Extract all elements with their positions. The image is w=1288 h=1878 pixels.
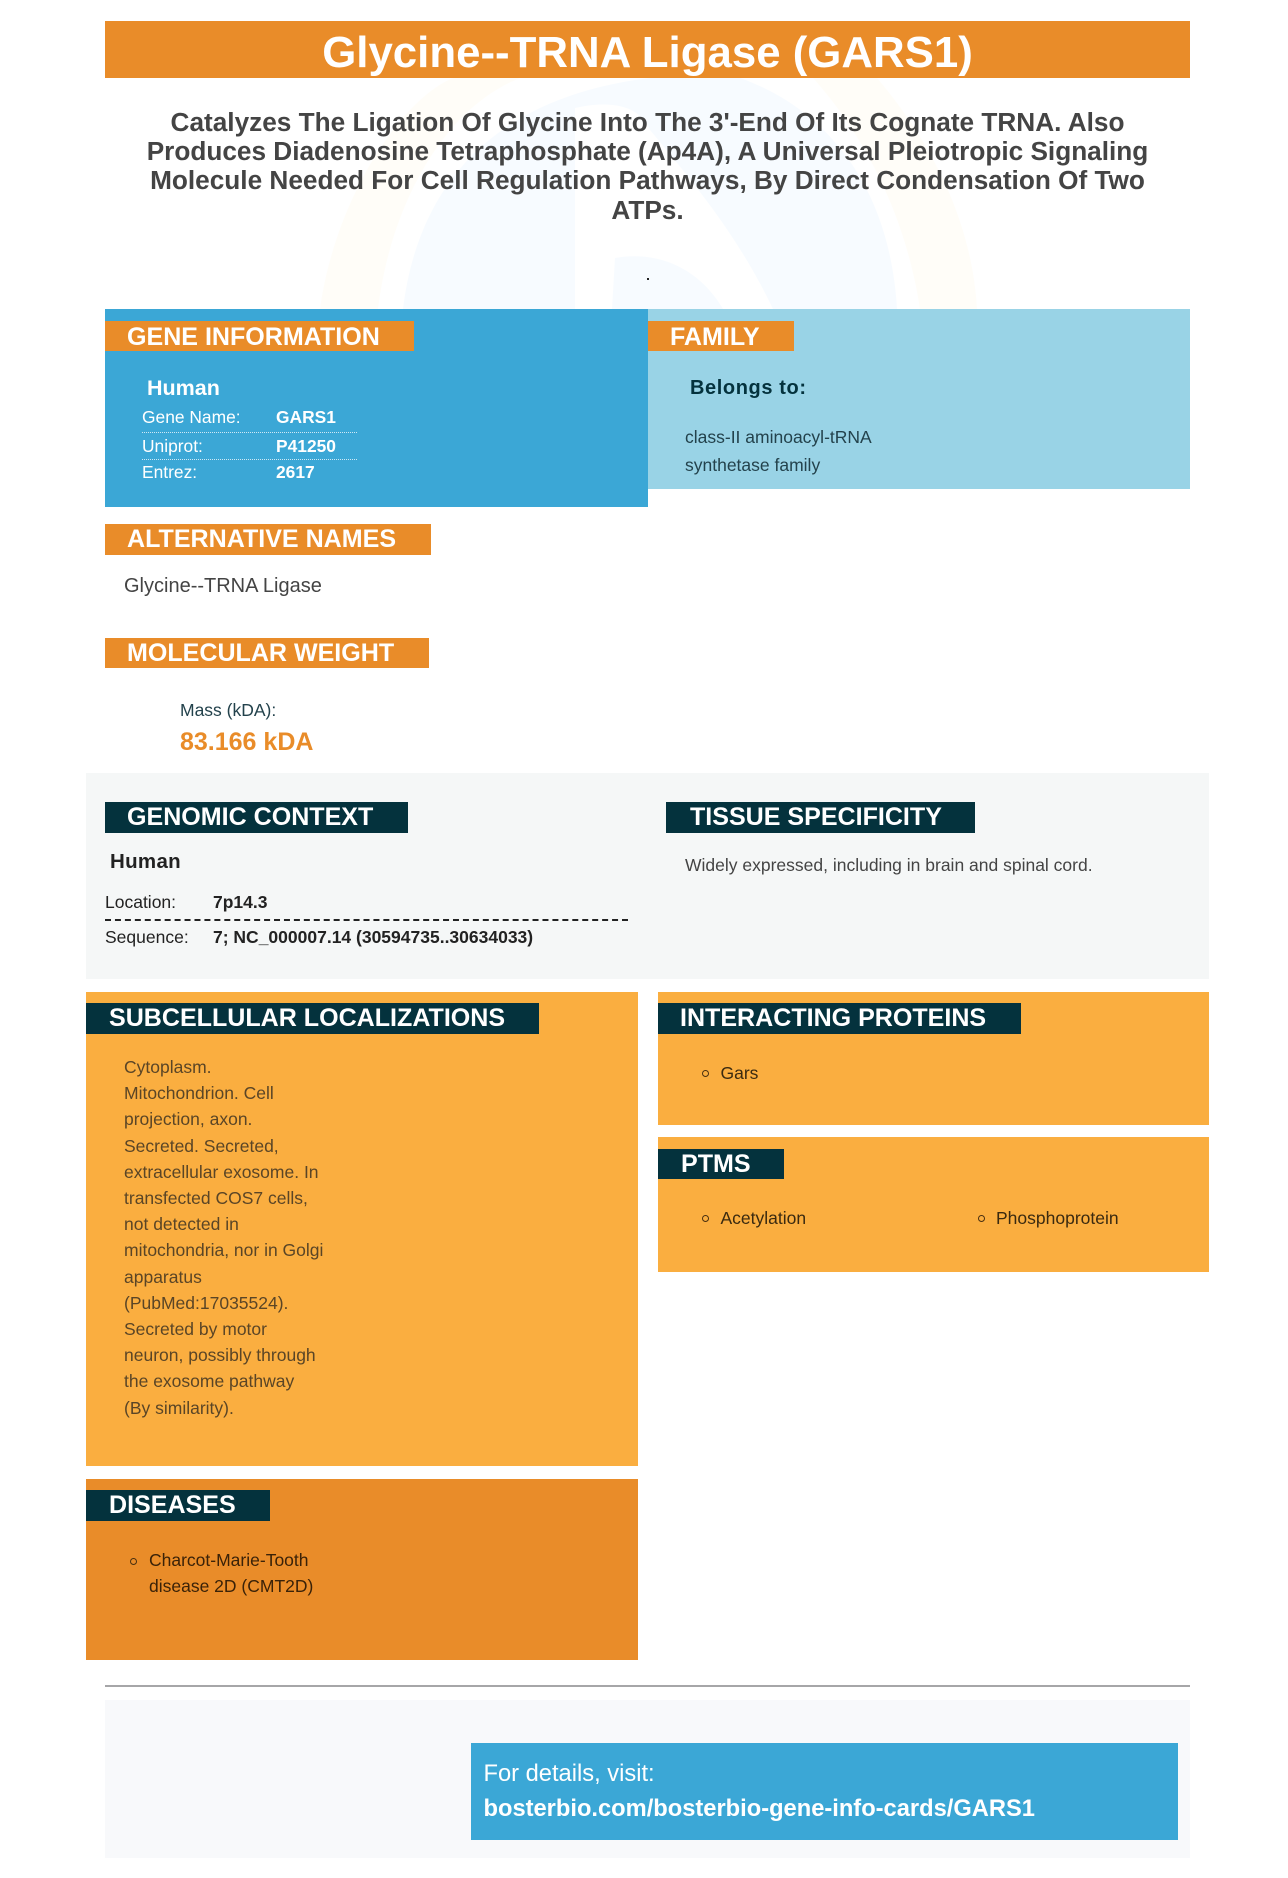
location table	[105, 892, 628, 947]
heading: gene information: GENE INFORMATION	[127, 323, 380, 351]
heading: family: FAMILY	[670, 323, 760, 351]
location table: 7; NC_000007.14 (30594735..30634033)	[213, 927, 533, 947]
gene table: Uniprot:	[142, 436, 203, 456]
panel: subcellular localizations	[86, 992, 638, 1466]
callout: details link	[471, 1743, 1178, 1840]
text: localization description: (PubMed:17035524).	[124, 1293, 288, 1313]
text: localization description: not detected in	[124, 1214, 239, 1234]
list item: Gars	[702, 1063, 758, 1083]
mass block: 83.166 kDA	[180, 728, 313, 756]
background watermark	[0, 0, 1288, 320]
heading: genomic context: GENOMIC CONTEXT	[127, 803, 373, 831]
location table: Location:	[105, 892, 176, 912]
text: localization description: Cytoplasm.	[124, 1057, 212, 1077]
text: localization description: Mitochondrion. Cell	[124, 1083, 274, 1103]
callout: details link: bosterbio.com/bosterbio-gene-info-cards/GARS1	[484, 1796, 1035, 1822]
list item: disease: Charcot-Marie-Tooth	[149, 1550, 308, 1570]
list item: Phosphoprotein: Phosphoprotein	[996, 1208, 1119, 1228]
callout: details link: For details, visit:	[484, 1761, 655, 1787]
list item: Gars: Gars	[720, 1063, 758, 1083]
gene table: P41250	[276, 436, 336, 456]
panel: gene information	[105, 309, 648, 507]
text: tissue specificity: Widely expressed, including in brain and spinal cord.	[685, 855, 1093, 875]
species label: Human	[110, 850, 181, 873]
text: localization description: (By similarity).	[124, 1398, 234, 1418]
text: localization description: apparatus	[124, 1267, 202, 1287]
gene table: Gene Name:	[142, 407, 241, 427]
text: localization description: projection, axon.	[124, 1109, 252, 1129]
panel: interacting proteins	[658, 992, 1209, 1125]
heading: subcellular localizations: SUBCELLULAR LOCALIZATIONS	[109, 1004, 505, 1032]
heading: PTMs	[658, 1149, 784, 1179]
heading: alternative names: ALTERNATIVE NAMES	[127, 525, 396, 553]
list item: disease: disease 2D (CMT2D)	[149, 1576, 313, 1596]
heading: interacting proteins: INTERACTING PROTEINS	[680, 1004, 986, 1032]
text: localization description: mitochondria, nor in Golgi	[124, 1240, 323, 1260]
title: Glycine--TRNA Ligase (GARS1)	[322, 28, 973, 77]
family text: synthetase family	[685, 455, 820, 475]
family text: class-II aminoacyl-tRNA	[685, 427, 872, 447]
text: localization description: Secreted by motor	[124, 1319, 267, 1339]
description: Catalyzes The Ligation Of Glycine Into The 3'-End Of Its Cognate TRNA. Also	[171, 107, 1124, 137]
text: localization description: extracellular exosome. In	[124, 1162, 319, 1182]
location table: 7p14.3	[213, 892, 267, 912]
mass block: Mass (kDA):	[180, 700, 276, 720]
heading: diseases: DISEASES	[109, 1491, 236, 1519]
heading: family	[648, 321, 794, 351]
text: localization description: the exosome pathway	[124, 1371, 294, 1391]
description: Produces Diadenosine Tetraphosphate (Ap4A), A Universal Pleiotropic Signaling	[147, 136, 1148, 166]
gene table: 2617	[276, 462, 315, 482]
panel: diseases	[86, 1479, 638, 1660]
text: localization description: neuron, possibly through	[124, 1345, 316, 1365]
description	[147, 107, 1148, 225]
text: localization description: Secreted. Secreted,	[124, 1136, 279, 1156]
text: localization description: transfected COS7 cells,	[124, 1188, 308, 1208]
belongs to label: Belongs to:	[690, 377, 807, 399]
heading: tissue specificity: TISSUE SPECIFICITY	[690, 803, 942, 831]
description: ATPs.	[611, 195, 684, 225]
location table: Sequence:	[105, 927, 189, 947]
panel: family	[648, 309, 1190, 489]
title	[105, 21, 1190, 78]
panel: genomic context and tissue specificity	[86, 773, 1209, 979]
text: localization description	[124, 1057, 323, 1418]
list item: Acetylation: Acetylation	[720, 1208, 806, 1228]
divider	[105, 1685, 1190, 1687]
mass block	[180, 700, 313, 756]
family text	[685, 427, 872, 475]
list item: disease	[130, 1550, 313, 1596]
heading: diseases	[86, 1490, 270, 1521]
heading: PTMs: PTMS	[681, 1150, 751, 1178]
heading: molecular weight: MOLECULAR WEIGHT	[127, 639, 394, 667]
panel: footer	[105, 1700, 1190, 1858]
text: alternative name: Glycine--TRNA Ligase	[124, 575, 322, 597]
species label: Human	[147, 376, 220, 400]
gene table	[142, 407, 357, 482]
gene table: GARS1	[276, 407, 336, 427]
separator dot	[647, 278, 649, 280]
description: Molecule Needed For Cell Regulation Pathways, By Direct Condensation Of Two	[150, 165, 1145, 195]
panel: PTMs	[658, 1137, 1209, 1272]
gene table: Entrez:	[142, 462, 197, 482]
